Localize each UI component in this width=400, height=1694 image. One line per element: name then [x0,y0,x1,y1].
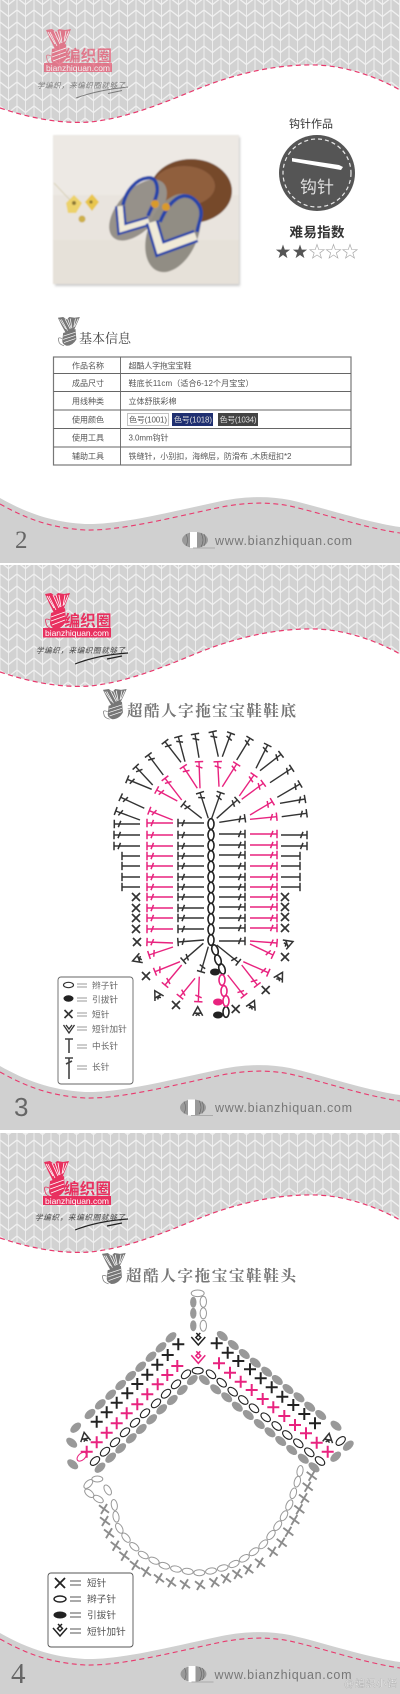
colour chips: 色号(1034) [220,415,257,425]
header band: page 1 [0,0,400,122]
tagline: page 1: 学编织，来编织圈就够了 [37,81,126,90]
legend: toe chart: 引拔针 [87,1608,116,1622]
tagline: page 3: 学编织，来编织圈就够了 [35,1213,126,1222]
heading: toe chart: 超酷人字拖宝宝鞋鞋头 [126,1266,297,1285]
legend: toe chart [48,1573,133,1647]
info table: 作品名称 [72,360,104,370]
info table: 立体舒肤彩棉 [128,396,176,406]
outer ring fan stitches [114,732,307,972]
grey slip stitches [64,1329,356,1475]
centre chain [208,819,229,1017]
logo: page 3: 编织圈 [64,1179,111,1198]
website: page 1: www.bianzhiquan.com [214,534,352,548]
icon: yarn, info heading [58,317,80,346]
info table: 使用颜色 [72,414,104,424]
legend: sole chart: 长针 [92,1061,110,1072]
website: page 3: www.bianzhiquan.com [214,1668,352,1682]
footer band: page 2 [0,1065,400,1130]
badge: crochet hook: 钩针 [300,178,334,197]
legend: toe chart: 辫子针 [87,1592,116,1606]
badge: crochet hook [279,135,355,211]
increase stitches [131,937,295,1016]
slip stitches and pink chain [210,968,229,1018]
legend: sole chart: 中长针 [92,1040,118,1051]
info table: 铁缝针，小别扣，海绵层，防滑布 ,木质纽扣*2 [128,451,292,461]
chart: sole stitches [114,732,307,1018]
footer band: page 1 [0,497,400,563]
page number 4: 4 [11,1658,26,1690]
colour chips: 色号(1018) [174,415,212,425]
website: page 2 [180,1100,352,1116]
difficulty heading: 难易指数 [290,224,345,240]
pink plus stitches [81,1357,334,1458]
strap chain [190,1290,206,1331]
logo: page 3: bianzhiquan.com [45,1196,109,1206]
colour chips: 色号(1001) [129,415,167,425]
product photo [53,135,240,286]
page number 2: 2 [15,527,28,554]
black chain [89,1367,347,1467]
difficulty stars [276,244,357,258]
legend: toe chart: 短针 [87,1576,107,1590]
logo: page 1 (faded): 编织圈 [65,46,112,65]
chart: toe stitches [64,1290,356,1590]
info table: 超酷人字拖宝宝鞋 [128,360,192,370]
legend: sole chart: 短针加针 [92,1023,127,1034]
tagline: page 3 [35,1213,128,1230]
legend: sole chart: 短针 [92,1008,110,1020]
legend: sole chart: 辫子针 [92,980,118,990]
logo: page 2 [43,593,112,638]
tagline: page 2 [36,646,128,664]
craft type label: 钩针作品 [289,116,333,130]
info table: 辅助工具 [72,451,104,461]
legend: toe chart: 短针加针 [87,1625,126,1638]
icon: yarn, toe heading [102,1253,126,1284]
info table: 3.0mm钩针 [128,432,168,442]
header band: page 3 [0,1133,400,1252]
end stitches [75,1432,334,1463]
tagline: page 2: 学编织，来编织圈就够了 [36,646,126,655]
grey bottom arc chain [82,1465,304,1576]
logo: page 3 [43,1161,111,1206]
info table: 成品尺寸 [72,378,104,388]
info table: 鞋底长11cm（适合6-12个月宝宝） [128,378,254,388]
heading: basic info: 基本信息 [79,331,132,346]
black plus stitches [91,1337,321,1429]
single crochet crosses [132,893,289,1013]
grey bottom arc crosses [99,1471,317,1590]
info table [54,357,351,465]
header band: page 2 [0,565,400,686]
footer band: page 3 [0,1632,400,1694]
heading: sole chart: 超酷人字拖宝宝鞋鞋底 [127,701,296,720]
watermark: @编织小语 [344,1677,397,1690]
info table: 用线种类 [72,396,104,406]
half double stitches [122,856,300,887]
tagline: page 1 [37,81,128,98]
legend: sole chart: 引拔针 [92,994,118,1004]
pink round stitches [147,762,277,1002]
website: page 2: www.bianzhiquan.com [214,1101,352,1115]
centre increases [191,1333,205,1363]
logo: page 1 (faded): bianzhiquan.com [46,63,110,73]
legend: sole chart [58,977,133,1084]
logo: page 2: bianzhiquan.com [45,628,109,638]
page number 3: 3 [14,1092,28,1122]
logo: page 1 (faded) [44,29,112,73]
logo: page 2: 编织圈 [64,611,112,630]
info table: 使用工具 [72,432,104,442]
icon: yarn, sole heading [103,689,127,719]
colour chips [128,413,258,426]
